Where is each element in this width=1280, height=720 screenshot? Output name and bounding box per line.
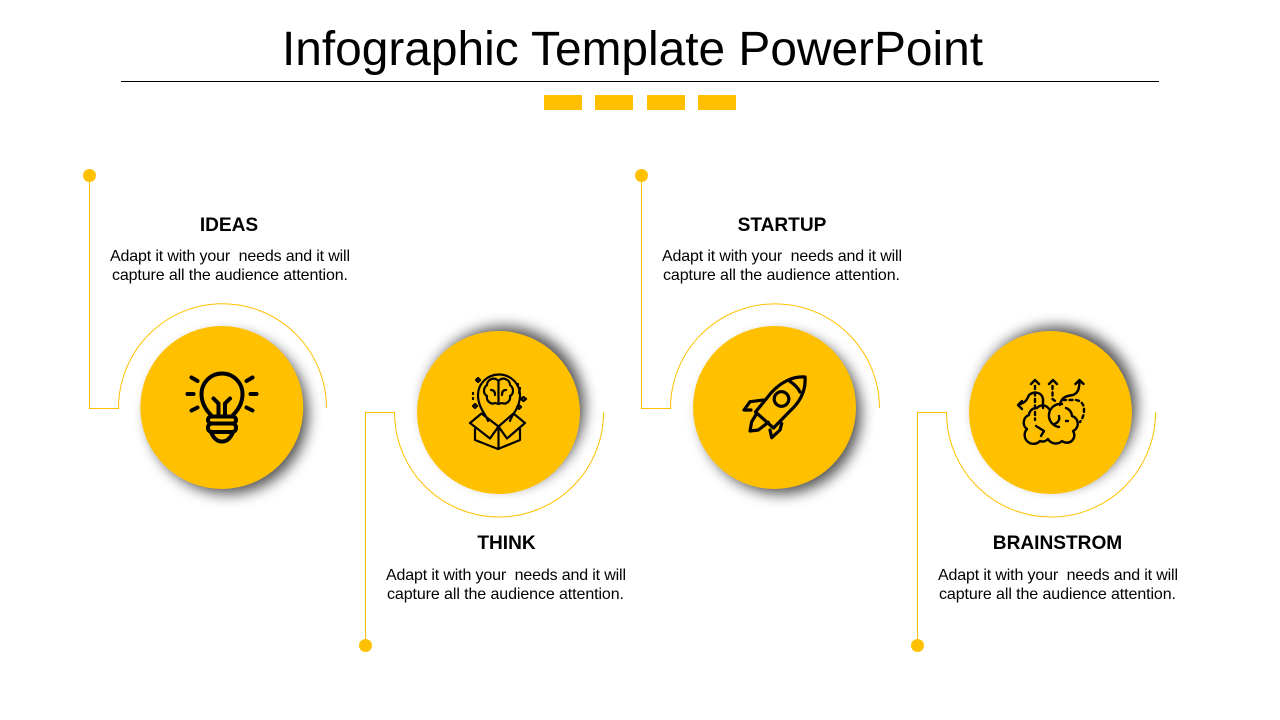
circle: startup: [693, 326, 856, 489]
text: startup: [662, 248, 902, 284]
panel: brainstorm: [911, 326, 1178, 652]
text: think: Adapt it with your needs and it will: [386, 567, 626, 584]
text: ideas: Adapt it with your needs and it will: [110, 248, 350, 265]
connector: think: [366, 412, 604, 645]
connector: startup: [642, 175, 880, 408]
text: think: [386, 567, 626, 603]
panel: ideas: [83, 169, 350, 494]
heading: brainstorm: BRAINSTROM: [993, 533, 1122, 554]
icon: brain with arrows: [1018, 380, 1084, 444]
text: brainstorm: [938, 567, 1178, 603]
panel: startup: [635, 169, 902, 494]
panel: think: [359, 326, 626, 652]
connector: ideas: [90, 175, 326, 408]
text: ideas: [110, 248, 350, 284]
circle shadow: ideas: [148, 334, 308, 494]
circle shadow: startup: [701, 334, 861, 494]
title rule: [121, 80, 1159, 82]
icon: light bulb: [188, 373, 256, 442]
title accent bars: [544, 95, 736, 110]
marker dot: startup: [635, 169, 648, 182]
marker dot: brainstorm: [911, 639, 924, 652]
circle: ideas: [140, 326, 303, 489]
title: Infographic Template PowerPoint: [282, 23, 983, 76]
icon: brain in bulb and box: [470, 374, 526, 449]
marker dot: think: [359, 639, 372, 652]
heading: think: THINK: [477, 533, 536, 554]
circle: think: [417, 331, 580, 494]
text: brainstorm: Adapt it with your needs and it will: [938, 567, 1178, 584]
circle shadow: brainstorm: [976, 326, 1136, 486]
connector: brainstorm: [918, 412, 1156, 645]
text: startup: Adapt it with your needs and it will: [662, 248, 902, 265]
circle shadow: think: [424, 326, 584, 486]
text: brainstorm: capture all the audience attention.: [939, 586, 1176, 603]
text: ideas: capture all the audience attention.: [112, 267, 348, 284]
circle: brainstorm: [969, 331, 1132, 494]
marker dot: ideas: [83, 169, 96, 182]
heading: ideas: IDEAS: [200, 215, 258, 236]
icon: rocket: [744, 377, 805, 438]
heading: startup: STARTUP: [738, 215, 827, 236]
text: think: capture all the audience attention.: [387, 586, 624, 603]
text: startup: capture all the audience attention.: [663, 267, 900, 284]
